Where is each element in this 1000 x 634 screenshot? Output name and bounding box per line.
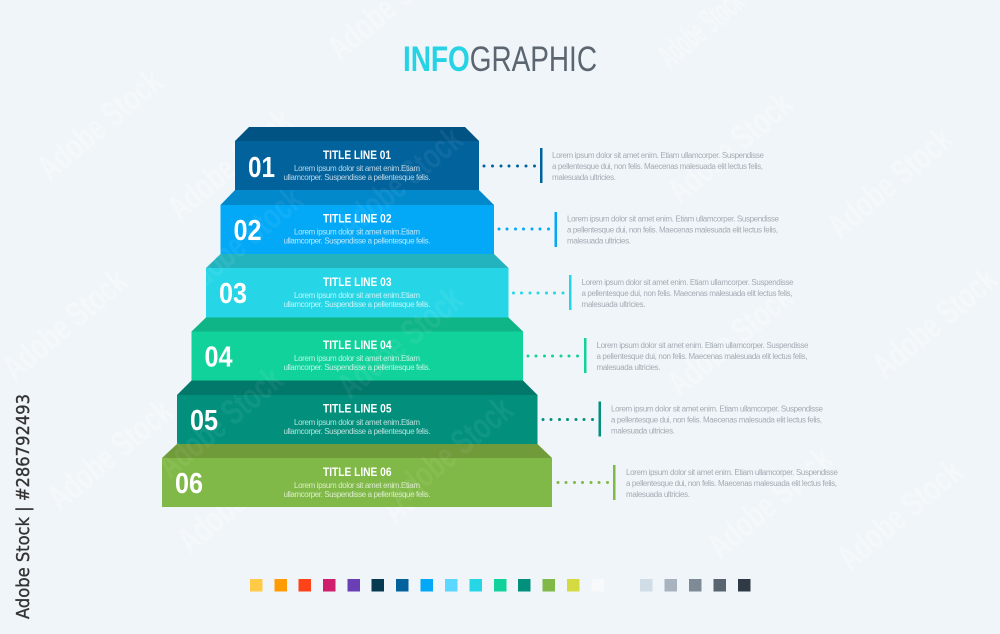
step 02 number: 02 — [234, 215, 262, 247]
stock credit: Adobe Stock | #286792493 — [14, 394, 34, 619]
step 06 body — [162, 458, 552, 507]
text: Adobe Stock — [329, 278, 471, 406]
step 01 body — [235, 141, 479, 190]
description 02: a pellentesque dui, non felis. Maecenas malesuada elit lectus felis, — [567, 226, 778, 234]
description 03: malesuada ultricies. — [582, 300, 646, 309]
step 01 — [235, 127, 479, 190]
connector 05 — [542, 402, 601, 436]
step 01 text: ullamcorper. Suspendisse a pellentesque felis. — [284, 173, 430, 182]
text: Adobe Stock — [159, 100, 301, 228]
description 01: malesuada ultricies. — [552, 173, 616, 182]
step 01 heading: TITLE LINE 01 — [323, 148, 391, 162]
step 05 — [177, 380, 538, 444]
description 03: Lorem ipsum dolor sit amet enim. Etiam ullamcorper. Suspendisse — [582, 278, 794, 287]
title: INFOGRAPHIC — [403, 40, 597, 79]
step 06 number: 06 — [175, 468, 203, 500]
step 03 heading: TITLE LINE 03 — [323, 275, 392, 289]
step 04 heading: TITLE LINE 04 — [323, 338, 392, 352]
step 04 text: ullamcorper. Suspendisse a pellentesque felis. — [284, 363, 430, 372]
step 04 number: 04 — [204, 342, 232, 374]
text: Adobe Stock — [169, 433, 311, 561]
text: Adobe Stock — [699, 438, 841, 566]
description 05: malesuada ultricies. — [611, 426, 675, 436]
step 03 — [206, 254, 508, 318]
description 05: a pellentesque dui, non felis. Maecenas malesuada elit lectus felis, — [611, 416, 822, 424]
step 02 heading: TITLE LINE 02 — [323, 212, 392, 226]
description 05: Lorem ipsum dolor sit amet enim. Etiam ullamcorper. Suspendisse — [611, 404, 824, 414]
description 01: a pellentesque dui, non felis. Maecenas malesuada elit lectus felis, — [552, 162, 763, 171]
step 03 top face — [206, 254, 508, 268]
description 06: a pellentesque dui, non felis. Maecenas malesuada elit lectus felis, — [626, 479, 837, 488]
connector 04 — [526, 338, 586, 373]
text: Adobe Stock — [659, 83, 801, 211]
step 03 body — [206, 268, 508, 318]
connector 01 — [482, 148, 542, 183]
step 06 text: ullamcorper. Suspendisse a pellentesque felis. — [284, 490, 430, 499]
description 02: Lorem ipsum dolor sit amet enim. Etiam ullamcorper. Suspendisse — [567, 214, 780, 224]
step 01 text: Lorem ipsum dolor sit amet enim.Etiam — [294, 164, 420, 173]
step 05 number: 05 — [190, 405, 218, 437]
step 04 body — [192, 332, 523, 380]
step 06 text: Lorem ipsum dolor sit amet enim.Etiam — [294, 481, 420, 490]
step 01 top face — [235, 127, 479, 141]
text: Adobe Stock — [39, 390, 181, 518]
step 03 text: Lorem ipsum dolor sit amet enim.Etiam — [294, 291, 420, 300]
description 04: Lorem ipsum dolor sit amet enim. Etiam ullamcorper. Suspendisse — [596, 341, 809, 350]
step 05 body — [177, 395, 538, 444]
step 04 top face — [192, 318, 523, 332]
description 06: malesuada ultricies. — [626, 490, 690, 499]
step 03 number: 03 — [219, 278, 247, 310]
description 03: a pellentesque dui, non felis. Maecenas malesuada elit lectus felis, — [582, 289, 792, 298]
step 04 — [192, 318, 523, 380]
connector 06 — [556, 465, 616, 500]
text: Adobe Stock — [659, 276, 801, 404]
step 02 text: ullamcorper. Suspendisse a pellentesque felis. — [284, 236, 430, 246]
step 06 — [162, 444, 552, 507]
description 06: Lorem ipsum dolor sit amet enim. Etiam ullamcorper. Suspendisse — [626, 468, 839, 477]
step 05 heading: TITLE LINE 05 — [323, 402, 392, 416]
step 02 text: Lorem ipsum dolor sit amet enim.Etiam — [294, 228, 420, 236]
text: Adobe Stock — [374, 403, 516, 531]
step 02 top face — [220, 190, 494, 205]
step 04 text: Lorem ipsum dolor sit amet enim.Etiam — [294, 354, 420, 363]
step 01 number: 01 — [248, 152, 275, 184]
step 02 body — [220, 205, 494, 254]
step 05 text: ullamcorper. Suspendisse a pellentesque felis. — [284, 427, 430, 436]
colour palette — [250, 579, 750, 592]
connector 03 — [512, 275, 572, 310]
text: Adobe Stock — [29, 60, 171, 188]
text: Adobe Stock — [329, 118, 471, 246]
step 03 text: ullamcorper. Suspendisse a pellentesque felis. — [284, 300, 430, 309]
description 02: malesuada ultricies. — [567, 236, 631, 246]
connector 02 — [498, 212, 557, 247]
description 04: a pellentesque dui, non felis. Maecenas malesuada elit lectus felis, — [596, 352, 808, 361]
text: Adobe Stock — [379, 388, 521, 516]
step 02 — [220, 190, 494, 254]
step 06 top face — [162, 444, 552, 458]
text: Adobe Stock — [149, 358, 291, 486]
step 06 heading: TITLE LINE 06 — [323, 465, 392, 479]
step 05 top face — [177, 380, 538, 395]
description 04: malesuada ultricies. — [596, 363, 660, 372]
description 01: Lorem ipsum dolor sit amet enim. Etiam ullamcorper. Suspendisse — [552, 151, 765, 160]
step 05 text: Lorem ipsum dolor sit amet enim.Etiam — [294, 418, 420, 427]
text: Adobe Stock — [169, 178, 311, 306]
